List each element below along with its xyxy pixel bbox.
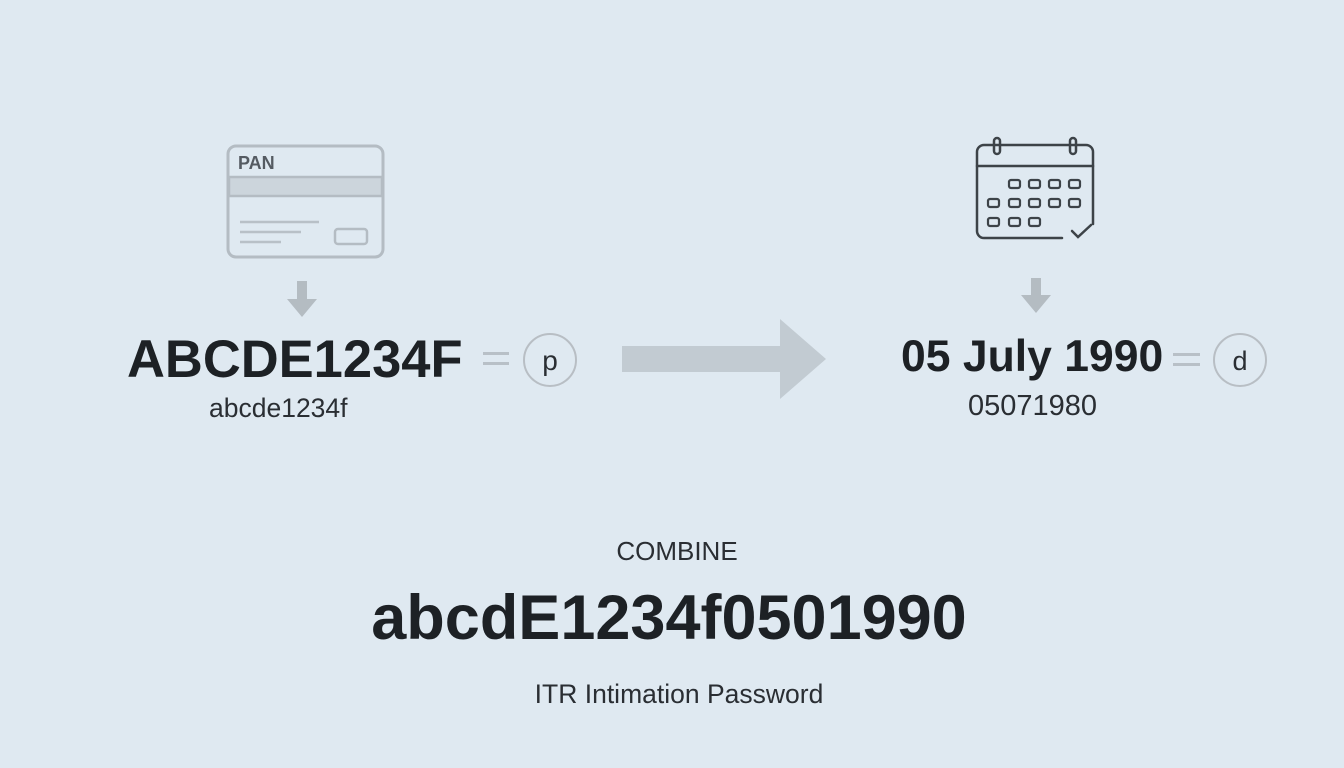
arrow: PAN down <box>287 281 317 317</box>
combined password: abcdE1234f0501990 <box>371 583 967 653</box>
equals + d circle: d <box>1232 346 1248 376</box>
COMBINE label: COMBINE <box>616 536 738 566</box>
equals + p circle <box>483 333 577 387</box>
caption: ITR Intimation Password <box>535 679 823 709</box>
icon: PAN card <box>226 144 384 258</box>
icon: calendar <box>976 136 1094 240</box>
arrow: big right <box>622 319 826 399</box>
PAN lowercase: abcde1234f <box>209 393 348 423</box>
date digits: 05071980 <box>968 390 1097 422</box>
equals + p circle: p <box>542 345 558 376</box>
arrow: date down <box>1021 278 1051 313</box>
equals + d circle <box>1173 333 1267 387</box>
PAN value: ABCDE1234F <box>127 330 463 389</box>
icon: PAN card: PAN <box>238 153 275 173</box>
date value: 05 July 1990 <box>901 332 1163 381</box>
